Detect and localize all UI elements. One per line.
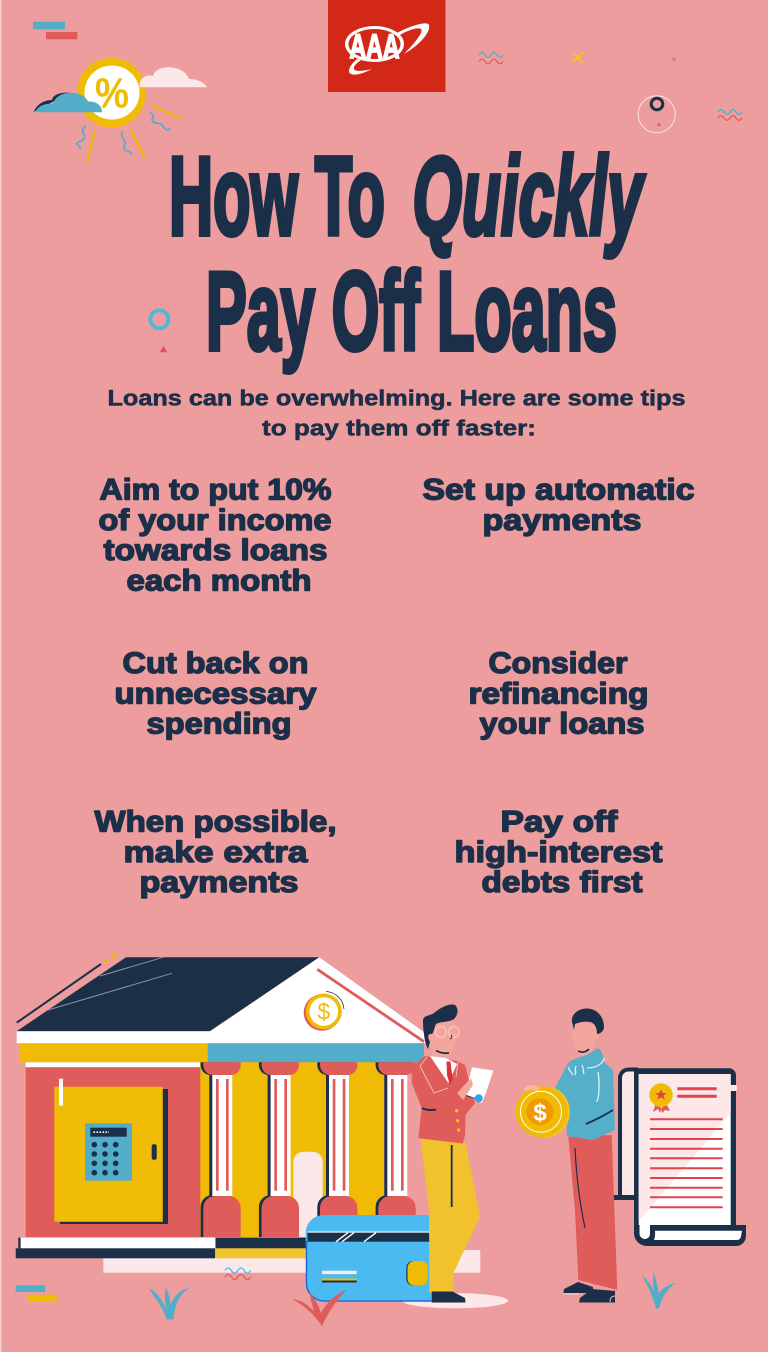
tip: aim to put 10%: towards loans	[104, 534, 328, 567]
icon: blue plant	[149, 1287, 190, 1320]
illustration: bank building	[16, 954, 428, 1258]
page lines	[650, 1089, 723, 1207]
shirt and tie	[420, 1056, 458, 1110]
icon: award seal	[650, 1084, 672, 1113]
decorative bars bottom left	[16, 1285, 57, 1301]
tip: automatic payments	[422, 474, 694, 537]
tip: high-interest debts: high-interest	[454, 836, 663, 869]
icon: gold dollar coin: $	[533, 1100, 547, 1126]
trousers	[568, 1135, 617, 1290]
tip: extra payments: When possible,	[94, 806, 336, 838]
column 1	[201, 1062, 241, 1237]
icon: dollar coin on pediment: $	[317, 998, 330, 1024]
intro text: to pay them off faster:	[262, 416, 536, 441]
trousers	[421, 1137, 480, 1293]
tip: extra payments	[94, 806, 336, 899]
vault wall	[26, 1062, 200, 1237]
tip: high-interest debts	[454, 806, 663, 899]
column 2	[259, 1062, 299, 1237]
tip: automatic payments: Set up automatic	[422, 474, 694, 506]
icon: percent coin with clouds	[34, 58, 207, 162]
tip: cut back: Cut back on	[122, 647, 308, 680]
back roll	[610, 1070, 636, 1200]
tip: cut back	[114, 647, 317, 740]
page body	[634, 1068, 746, 1246]
roof	[17, 954, 319, 1031]
logo: AAA badge: AAA	[350, 28, 400, 66]
shoes	[564, 1282, 615, 1302]
ground strip	[103, 1250, 480, 1273]
icon: dollar coin on pediment	[304, 992, 344, 1031]
entablature bands	[20, 1043, 424, 1062]
icon: keypad	[85, 1123, 132, 1181]
decorative bars top left	[33, 22, 77, 39]
illustration: man with coin	[516, 1008, 617, 1302]
hoodie	[555, 1048, 615, 1140]
buttons	[455, 1109, 460, 1132]
tip: refinancing	[468, 647, 648, 740]
title	[169, 135, 645, 374]
decoration: ring and triangle by title	[150, 310, 168, 352]
icon: blue plant right	[642, 1272, 676, 1308]
logo: AAA badge	[328, 0, 446, 92]
tip: cut back: spending	[146, 708, 292, 740]
shoe	[432, 1292, 466, 1302]
notepad and hand	[457, 1067, 493, 1103]
tip: high-interest debts: debts first	[482, 866, 643, 899]
pediment	[17, 957, 428, 1043]
icon: gold dollar coin	[516, 1085, 570, 1138]
decoration: squiggles and marks top right	[479, 52, 742, 133]
tip: automatic payments: payments	[482, 504, 642, 537]
tip: refinancing: refinancing	[468, 677, 648, 710]
decoration: squiggle under bank	[225, 1268, 251, 1280]
tip: aim to put 10%	[98, 474, 332, 597]
ground ellipse under man	[402, 1293, 508, 1308]
icon: percent coin with clouds: %	[95, 70, 129, 118]
tip: refinancing: Consider	[488, 647, 628, 680]
tip: refinancing: your loans	[480, 708, 644, 740]
entrance door	[293, 1152, 323, 1237]
tip: high-interest debts: Pay off	[500, 806, 618, 838]
tip: aim to put 10%: Aim to put 10%	[100, 474, 332, 506]
illustration: credit card	[306, 1215, 432, 1302]
tip: cut back: unnecessary	[114, 677, 317, 710]
tip: extra payments: payments	[140, 866, 298, 899]
column 4	[376, 1062, 416, 1237]
icon: red plant	[292, 1290, 347, 1326]
head	[423, 1004, 460, 1057]
head	[572, 1008, 604, 1058]
steps	[16, 1238, 307, 1258]
jacket	[412, 1056, 475, 1144]
tip: aim to put 10%: of your income	[98, 504, 332, 537]
column 3	[317, 1062, 357, 1237]
tip: aim to put 10%: each month	[126, 564, 312, 597]
illustration: man with notepad	[412, 1004, 493, 1302]
colonnade backdrop	[200, 1062, 383, 1237]
tip: extra payments: make extra	[124, 836, 308, 869]
illustration: scroll document	[610, 1068, 746, 1246]
intro text: Loans can be overwhelming. Here are some tips	[108, 386, 686, 410]
intro text	[108, 386, 686, 441]
